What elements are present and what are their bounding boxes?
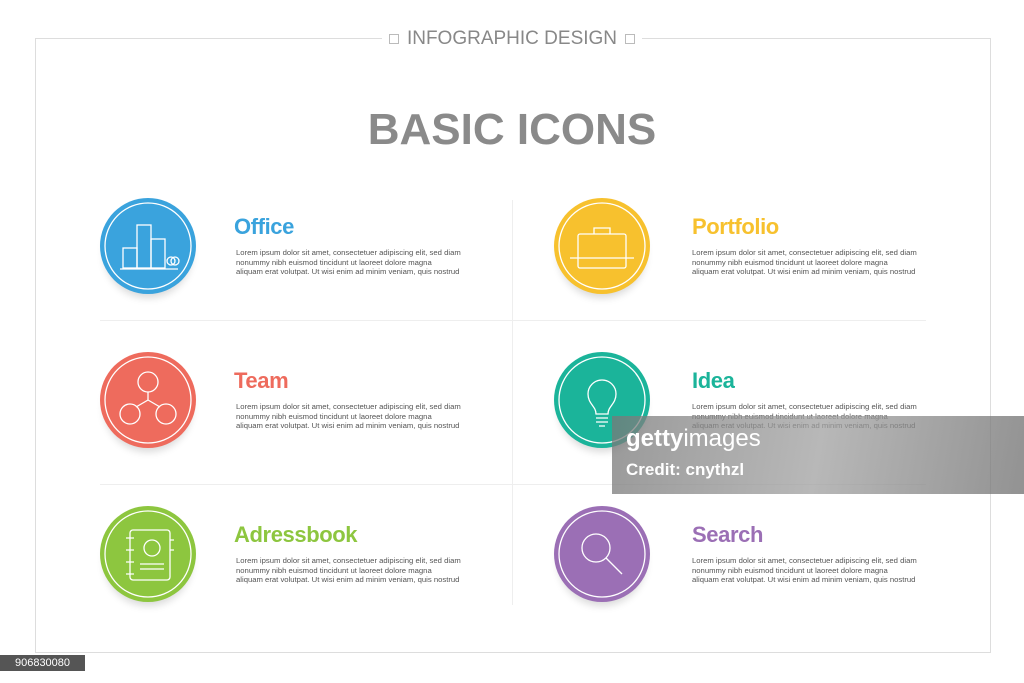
panel: portfolio — [554, 198, 917, 300]
text: office: nonummy nibh euismod tincidunt ut laoreet dolore magna — [236, 258, 432, 267]
text: portfolio — [692, 248, 917, 276]
text: search: Lorem ipsum dolor sit amet, consectetuer adipiscing elit, sed diam — [692, 556, 917, 565]
text: team — [236, 402, 461, 430]
icon: portfolio — [554, 198, 650, 294]
text: adressbook: Lorem ipsum dolor sit amet, consectetuer adipiscing elit, sed diam — [236, 556, 461, 565]
heading: team: Team — [234, 368, 288, 393]
icon: team — [100, 352, 196, 448]
icon: search — [554, 506, 650, 602]
icon: adressbook — [100, 506, 196, 602]
text: adressbook: nonummy nibh euismod tincidunt ut laoreet dolore magna — [236, 566, 432, 575]
text: idea: nonummy nibh euismod tincidunt ut laoreet dolore magna — [692, 412, 888, 421]
text: team: aliquam erat volutpat. Ut wisi enim ad minim veniam, quis nostrud — [236, 421, 459, 430]
text: idea: aliquam erat volutpat. Ut wisi enim ad minim veniam, quis nostrud — [692, 421, 915, 430]
heading: office: Office — [234, 214, 294, 239]
heading: portfolio: Portfolio — [692, 214, 779, 239]
text: team: Lorem ipsum dolor sit amet, consectetuer adipiscing elit, sed diam — [236, 402, 461, 411]
text: search: nonummy nibh euismod tincidunt ut laoreet dolore magna — [692, 566, 888, 575]
watermark — [612, 416, 1024, 494]
text: search: aliquam erat volutpat. Ut wisi enim ad minim veniam, quis nostrud — [692, 575, 915, 584]
heading: idea: Idea — [692, 368, 734, 393]
text: portfolio: Lorem ipsum dolor sit amet, consectetuer adipiscing elit, sed diam — [692, 248, 917, 257]
title: BASIC ICONS — [368, 105, 656, 154]
text: adressbook — [236, 556, 461, 584]
panel: office — [100, 198, 461, 300]
id label: 906830080 — [15, 657, 70, 669]
watermark: Credit: cnythzl — [626, 460, 744, 479]
panel: team — [100, 352, 461, 454]
text: adressbook: aliquam erat volutpat. Ut wisi enim ad minim veniam, quis nostrud — [236, 575, 459, 584]
text: portfolio: aliquam erat volutpat. Ut wisi enim ad minim veniam, quis nostrud — [692, 267, 915, 276]
text: portfolio: nonummy nibh euismod tincidunt ut laoreet dolore magna — [692, 258, 888, 267]
text: team: nonummy nibh euismod tincidunt ut laoreet dolore magna — [236, 412, 432, 421]
dividers — [100, 320, 926, 321]
text: office — [236, 248, 461, 276]
text: search — [692, 556, 917, 584]
panel: search — [554, 506, 917, 608]
panel: adressbook — [100, 506, 461, 608]
heading: adressbook: Adressbook — [234, 522, 357, 547]
text: office: aliquam erat volutpat. Ut wisi enim ad minim veniam, quis nostrud — [236, 267, 459, 276]
icon: idea — [554, 352, 650, 448]
id label — [0, 655, 85, 671]
subtitle: INFOGRAPHIC DESIGN — [407, 28, 617, 49]
panel: idea — [554, 352, 917, 454]
text: idea: Lorem ipsum dolor sit amet, consectetuer adipiscing elit, sed diam — [692, 402, 917, 411]
text: office: Lorem ipsum dolor sit amet, consectetuer adipiscing elit, sed diam — [236, 248, 461, 257]
icon: office — [100, 198, 196, 294]
heading: search: Search — [692, 522, 763, 547]
text: idea — [692, 402, 917, 430]
watermark: gettyimages — [626, 425, 761, 452]
